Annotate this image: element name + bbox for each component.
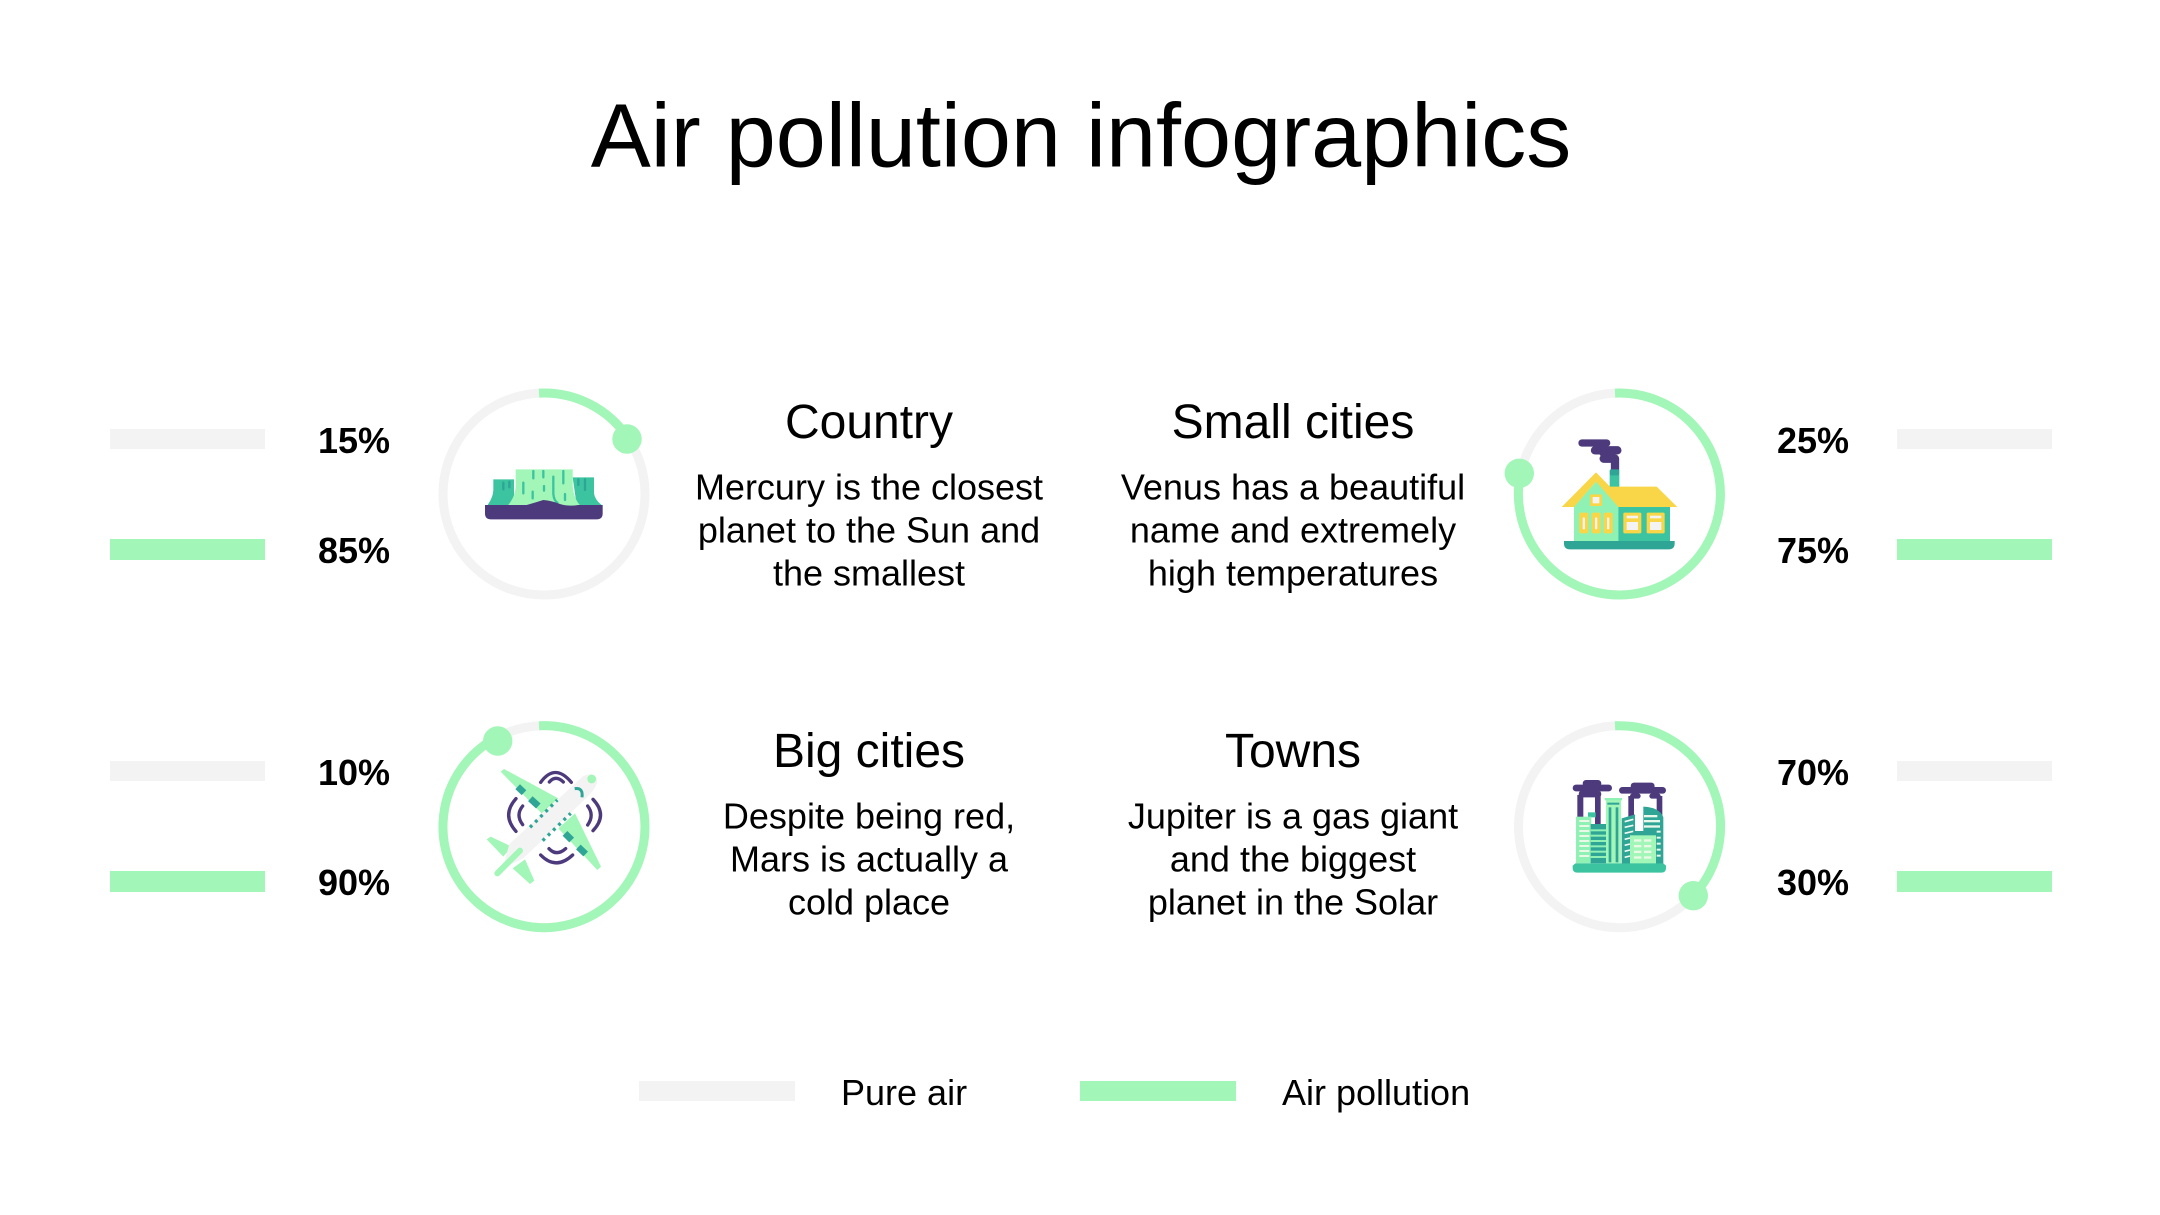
comparison bars: country [110,429,265,560]
percentages: small cities [1777,420,1849,571]
description: towns: planet in the Solar [1148,882,1438,922]
description: country: Mercury is the closest [695,466,1043,508]
percentages: small cities: 75% [1777,530,1849,571]
ring gauge: country [443,393,645,595]
percentages: towns: 30% [1777,862,1849,903]
comparison bars: towns [1897,761,2052,892]
percentages: big cities [318,752,390,903]
description: country: planet to the Sun and [698,510,1040,550]
comparison bars: small cities [1897,429,2052,560]
description: big cities: Despite being red, [723,796,1015,836]
heading: small cities: Small cities [1172,396,1414,449]
percentages: towns [1777,752,1849,903]
percentages: country: 15% [318,420,390,461]
icon: city buildings with chimneys [1573,783,1666,873]
description: country: the smallest [773,552,965,594]
percentages: country: 85% [318,530,390,571]
legend [639,1072,1470,1113]
icon: house with smoke [1562,443,1677,549]
description: small cities: Venus has a beautiful [1121,466,1465,508]
legend item: pure air [639,1072,967,1113]
ring gauge: small cities [1505,393,1720,595]
panel: country [110,393,1043,595]
legend item: air pollution [1080,1072,1470,1113]
heading: towns: Towns [1225,725,1361,778]
percentages: small cities: 25% [1777,420,1849,461]
percentages: big cities: 90% [318,862,390,903]
panel: towns [1128,725,2052,928]
heading: big cities: Big cities [773,725,965,778]
legend item: pure air: Pure air [841,1072,967,1113]
icon: airplane [487,769,601,884]
percentages: country [318,420,390,571]
panel: big cities [110,725,1015,928]
percentages: towns: 70% [1777,752,1849,793]
comparison bars: big cities [110,761,265,892]
description: big cities: Mars is actually a [730,838,1009,880]
icon: canyon landscape [485,469,603,519]
ring gauge: big cities [443,726,645,928]
description: towns: Jupiter is a gas giant [1128,796,1458,836]
description: big cities: cold place [788,882,950,922]
description: small cities: high temperatures [1148,552,1438,594]
ring gauge: towns [1518,726,1721,928]
panel: small cities [1121,393,2052,595]
legend item: air pollution: Air pollution [1282,1072,1470,1113]
title: Air pollution infographics [591,86,1571,186]
percentages: big cities: 10% [318,752,390,793]
description: towns: and the biggest [1170,838,1416,880]
heading: country: Country [785,396,953,449]
description: small cities: name and extremely [1130,510,1456,550]
